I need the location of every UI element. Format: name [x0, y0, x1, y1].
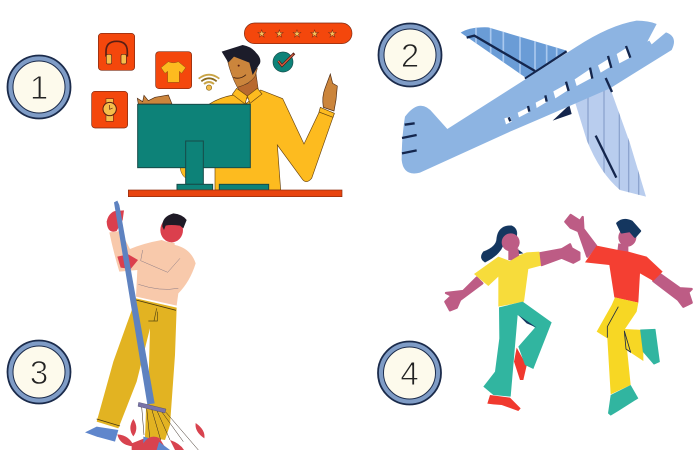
- trousers: [483, 302, 552, 397]
- badge: number 4: 4: [400, 355, 419, 392]
- collar: [232, 88, 262, 104]
- desk: [128, 190, 342, 197]
- raised arm: [565, 215, 596, 257]
- icon: watch tile: [92, 91, 128, 128]
- illustration: man shopping online at a computer: [92, 23, 352, 197]
- back leg and shoe: [625, 329, 643, 361]
- badge: number 2: [378, 24, 442, 86]
- shoe: [608, 385, 638, 416]
- shoes: [487, 395, 521, 411]
- rating pill with five stars: ★: [275, 29, 284, 40]
- badge: number 1: [8, 56, 70, 118]
- shirt: [585, 246, 663, 303]
- shirt: [474, 252, 541, 307]
- hair: [481, 226, 517, 262]
- hands: [107, 210, 124, 232]
- icon: headphones tile: [98, 33, 135, 70]
- sweater: [109, 231, 196, 306]
- fuselage with windows: [402, 21, 674, 173]
- leaves behind: [117, 419, 204, 450]
- shirt: [209, 90, 334, 190]
- badge: number 1: 1: [30, 69, 48, 106]
- icon: t-shirt tile: [156, 52, 192, 89]
- raised hand: [323, 74, 337, 111]
- computer monitor: [138, 104, 269, 190]
- shoes: [85, 427, 118, 442]
- lower wing: [553, 78, 646, 198]
- rake with tines: [114, 201, 198, 450]
- illustration: blue airplane: [402, 21, 674, 198]
- trousers: [97, 298, 177, 440]
- head and hair: [160, 218, 183, 242]
- rating pill with five stars: ★: [328, 29, 337, 40]
- face and neck: [502, 233, 520, 251]
- rating pill with five stars: ★: [257, 29, 266, 40]
- rating pill with five stars: ★: [293, 29, 302, 40]
- head: [618, 228, 636, 247]
- icon: check mark: [273, 52, 294, 72]
- illustration: man raking leaves: [85, 201, 204, 450]
- rating pill with five stars: ★: [310, 29, 319, 40]
- man: [565, 215, 692, 416]
- badge: number 2: 2: [401, 37, 419, 74]
- rating pill with five stars: [244, 23, 352, 44]
- man figure: [137, 45, 337, 190]
- arms: [540, 244, 579, 265]
- hair: [222, 45, 260, 75]
- trousers: [597, 297, 638, 394]
- neck and face: [237, 73, 258, 99]
- icon: wifi: [199, 75, 219, 90]
- badge: number 3: 3: [30, 354, 48, 391]
- outstretched arm: [653, 272, 692, 307]
- badge: number 4: [378, 342, 441, 404]
- upper wing: [461, 27, 567, 79]
- leaves in front: [142, 437, 160, 450]
- badge: number 3: [8, 340, 70, 404]
- woman: [445, 226, 579, 411]
- illustration: two people high-fiving: [445, 215, 692, 416]
- hand on monitor: [137, 95, 172, 104]
